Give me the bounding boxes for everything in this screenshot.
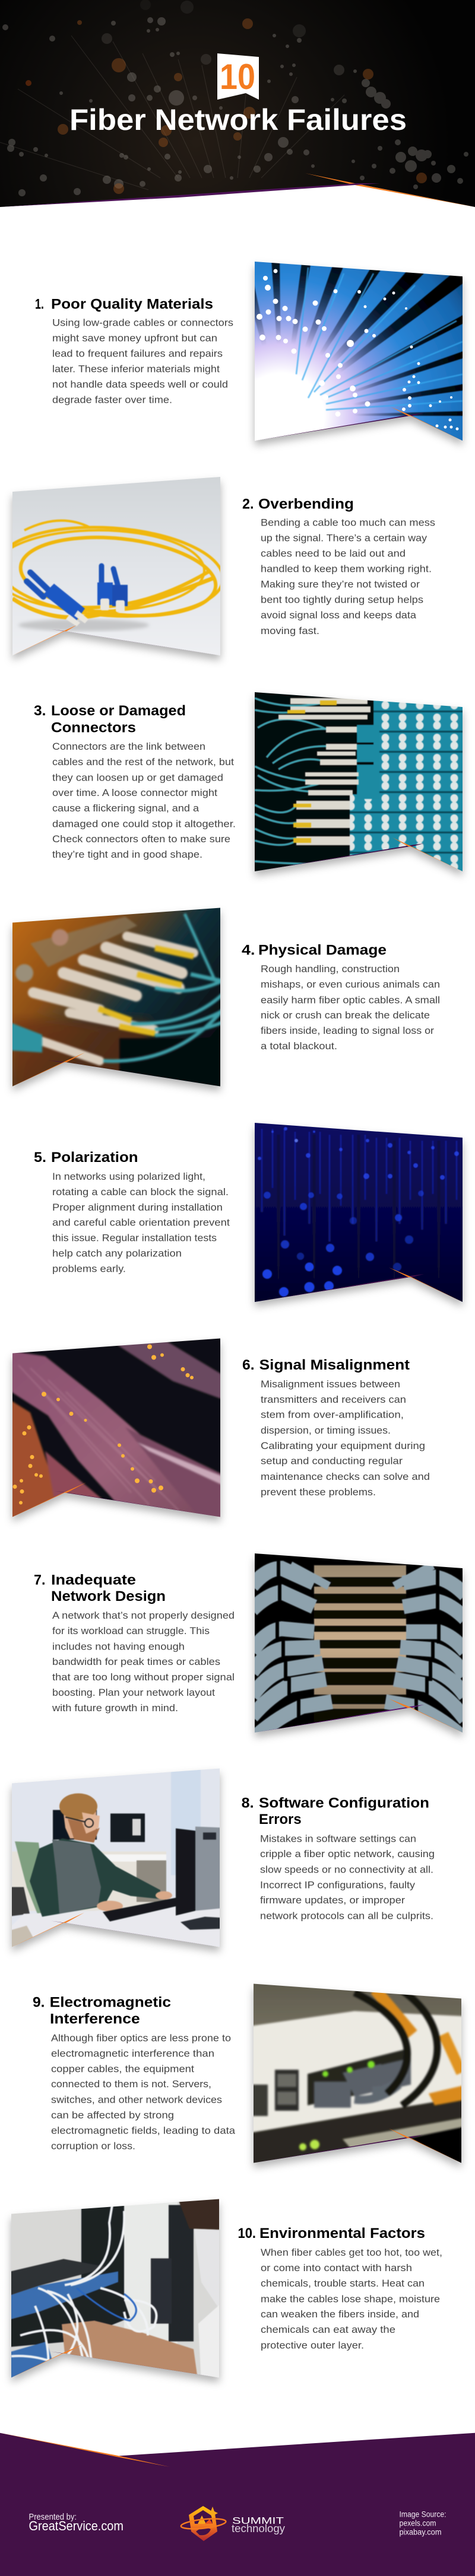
body text 4: Rough handling, construction	[261, 964, 400, 975]
body text 6	[261, 1379, 430, 1498]
body text 5: Proper alignment during installation	[52, 1202, 223, 1213]
body text 4: a total blackout.	[261, 1041, 337, 1052]
body text 9: Although fiber optics are less prone to	[51, 2033, 231, 2044]
body text 2: moving fast.	[261, 626, 319, 636]
photo: pink fiber bundles with orange points	[7, 1332, 226, 1523]
heading 6: 6.	[242, 1357, 255, 1373]
body text 7: for its workload can struggle. This	[52, 1626, 210, 1636]
body text 3: Connectors are the link between	[52, 741, 205, 752]
presented by: Presented by:	[28, 2513, 77, 2522]
header banner	[0, 0, 475, 207]
body text 5	[52, 1171, 230, 1275]
body text 9: electromagnetic fields, leading to data	[51, 2125, 236, 2136]
heading 9: Interference	[50, 2011, 140, 2027]
body text 5: and careful cable orientation prevent	[52, 1218, 230, 1228]
body text 9	[51, 2033, 236, 2152]
body text 3: Check connectors often to make sure	[52, 834, 230, 845]
section 6: signal misalignment	[7, 1332, 430, 1523]
body text 4: nick or crush can break the delicate	[261, 1010, 430, 1021]
presented by: GreatService.com	[28, 2518, 124, 2533]
body text 10: chemicals, trouble starts. Heat can	[261, 2278, 425, 2289]
banner background photo	[0, 0, 475, 207]
body text 7: bandwidth for peak times or cables	[52, 1657, 220, 1667]
heading 8: 8.	[242, 1795, 254, 1811]
photo: server rack cable bundles	[249, 1547, 468, 1738]
body text 3: cables and the rest of the network, but	[52, 757, 234, 768]
body text 2: handled to keep them working right.	[261, 564, 432, 575]
body text 1	[52, 318, 233, 406]
heading 9: 9.	[33, 1994, 45, 2011]
body text 7: includes not having enough	[52, 1641, 185, 1652]
body text 7: that are too long without proper signal	[52, 1672, 235, 1683]
photo: technician wiring a switch	[5, 2193, 225, 2384]
heading 9: Electromagnetic	[50, 1994, 171, 2011]
body text 6: prevent these problems.	[261, 1487, 376, 1498]
body text 6: Misalignment issues between	[261, 1379, 400, 1390]
body text 2: Making sure they’re not twisted or	[261, 579, 420, 590]
photo: teal patch panel	[249, 686, 468, 877]
body text 5: rotating a cable can block the signal.	[52, 1187, 229, 1198]
heading 7: Inadequate	[51, 1572, 136, 1588]
icon: summit shield	[180, 2506, 226, 2541]
body text 9: corruption or loss.	[51, 2141, 135, 2152]
body text 7	[52, 1610, 235, 1714]
logo	[180, 2506, 285, 2541]
body text 2: Bending a cable too much can mess	[261, 518, 435, 528]
body text 10: When fiber cables get too hot, too wet,	[261, 2247, 442, 2258]
body text 2: up the signal. There’s a certain way	[261, 533, 428, 543]
body text 9: copper cables, the equipment	[51, 2064, 194, 2074]
heading 10: Environmental Factors	[259, 2225, 425, 2241]
image source credits: Image Source:	[399, 2510, 446, 2518]
heading 7: 7.	[34, 1572, 45, 1588]
heading 8	[242, 1795, 429, 1827]
image source credits: pexels.com	[399, 2518, 436, 2528]
body text 3: they can loosen up or get damaged	[52, 772, 223, 783]
body text 10: protective outer layer.	[261, 2340, 364, 2351]
logo wordmark: SUMMIT	[232, 2516, 284, 2526]
section 8: software configuration errors	[6, 1763, 435, 1954]
body text 6: Calibrating your equipment during	[261, 1441, 425, 1451]
body text 8	[260, 1833, 435, 1921]
body text 9: can be affected by strong	[51, 2110, 174, 2120]
body text 10: chemicals can eat away the	[261, 2325, 395, 2335]
presented by	[28, 2513, 124, 2533]
logo wordmark: technology	[232, 2523, 285, 2534]
heading 7: Network Design	[51, 1588, 166, 1604]
heading 10: 10.	[238, 2225, 256, 2241]
photo: yellow fiber patch cable	[0, 471, 226, 662]
body text 1: lead to frequent failures and repairs	[52, 348, 223, 359]
heading 2: 2.	[242, 496, 254, 512]
section 9: electromagnetic interference	[33, 1978, 467, 2169]
section 2: overbending	[0, 471, 435, 662]
heading 5: Polarization	[51, 1150, 138, 1166]
body text 3	[52, 741, 236, 860]
heading 3: Loose or Damaged	[51, 703, 186, 719]
body text 6: transmitters and receivers can	[261, 1394, 406, 1405]
heading 5: 5.	[34, 1150, 46, 1166]
body text 5: help catch any polarization	[52, 1248, 182, 1259]
heading 9	[33, 1994, 171, 2027]
photo: blue fiber lights	[249, 1117, 468, 1308]
body text 1: might save money upfront but can	[52, 333, 217, 343]
heading 1: 1.	[35, 297, 44, 312]
body text 8: Incorrect IP configurations, faulty	[260, 1880, 416, 1890]
image source credits: pixabay.com	[399, 2528, 442, 2536]
image source credits	[399, 2510, 446, 2536]
body text 9: connected to them is not. Servers,	[51, 2079, 211, 2090]
body text 10: can weaken the fibers inside, and	[261, 2309, 419, 2320]
body text 6: maintenance checks can solve and	[261, 1472, 430, 1482]
heading 7	[34, 1572, 166, 1604]
body text 6: stem from over-amplification,	[261, 1410, 404, 1421]
photo: orange board and white connectors	[7, 902, 226, 1093]
body text 7: with future growth in mind.	[52, 1703, 178, 1714]
body text 2: avoid signal loss and keeps data	[261, 610, 417, 620]
heading 3: 3.	[34, 703, 46, 719]
section 4: physical damage	[7, 902, 440, 1093]
body text 8: network protocols can all be culprits.	[260, 1910, 433, 1921]
body text 3: cause a flickering signal, and a	[52, 803, 200, 814]
body text 4	[261, 964, 440, 1052]
heading 2: Overbending	[258, 496, 354, 512]
body text 1: later. These inferior materials might	[52, 364, 220, 375]
section 10: environmental factors	[5, 2193, 442, 2384]
body text 7: A network that’s not properly designed	[52, 1610, 235, 1621]
body text 5: In networks using polarized light,	[52, 1171, 205, 1182]
heading 8: Errors	[259, 1811, 302, 1827]
photo: glowing blue fiber strands	[249, 256, 468, 447]
orange accent line	[305, 173, 475, 207]
body text 1: Using low-grade cables or connectors	[52, 318, 233, 329]
body text 8: Mistakes in software settings can	[260, 1833, 416, 1844]
body text 2: cables need to be laid out and	[261, 548, 406, 559]
body text 10	[261, 2247, 442, 2351]
body text 10: or come into contact with harsh	[261, 2263, 412, 2273]
body text 8: cripple a fiber optic network, causing	[260, 1849, 435, 1859]
body text 5: problems early.	[52, 1264, 126, 1275]
body text 3: over time. A loose connector might	[52, 788, 217, 798]
section 3: loose or damaged connectors	[34, 686, 468, 877]
body text 10: make the cables lose shape, moisture	[261, 2294, 440, 2304]
body text 6: setup and conducting regular	[261, 1456, 403, 1467]
body text 3: they’re tight and in good shape.	[52, 849, 202, 860]
badge with number 10: 10	[220, 57, 255, 97]
heading 3	[34, 703, 186, 735]
body text 2: bent too tightly during setup helps	[261, 594, 423, 605]
body text 5: this issue. Regular installation tests	[52, 1233, 217, 1244]
body text 8: slow speeds or no connectivity at all.	[260, 1864, 433, 1875]
body text 7: boosting. Plan your network layout	[52, 1687, 215, 1698]
body text 9: switches, and other network devices	[51, 2095, 222, 2106]
orange accent line	[0, 2433, 170, 2467]
logo wordmark	[232, 2516, 285, 2534]
photo: network router ports	[248, 1978, 467, 2169]
heading 6: Signal Misalignment	[259, 1357, 410, 1373]
footer	[0, 2433, 475, 2576]
heading 4: 4.	[242, 942, 255, 959]
body text 1: not handle data speeds well or could	[52, 380, 228, 390]
body text 4: easily harm fiber optic cables. A small	[261, 995, 440, 1005]
heading 1: Poor Quality Materials	[51, 297, 213, 312]
heading 4: Physical Damage	[258, 942, 387, 959]
body text 3: damaged one could stop it altogether.	[52, 819, 236, 829]
body text 4: mishaps, or even curious animals can	[261, 979, 440, 990]
purple accent line	[0, 183, 380, 207]
section 5: polarization	[34, 1117, 468, 1308]
footer background	[0, 2433, 475, 2576]
section 7: inadequate network design	[34, 1547, 468, 1738]
title: Fiber Network Failures	[69, 103, 407, 136]
heading 8: Software Configuration	[259, 1795, 429, 1811]
section 1: poor quality materials	[35, 256, 468, 447]
body text 9: electromagnetic interference than	[51, 2048, 214, 2059]
body text 2	[261, 518, 435, 636]
heading 3: Connectors	[51, 719, 136, 735]
body text 8: firmware updates, or improper	[260, 1895, 406, 1906]
photo: engineer at computer	[6, 1763, 226, 1954]
body text 6: dispersion, or timing issues.	[261, 1425, 391, 1436]
body text 4: fibers inside, leading to signal loss or	[261, 1026, 435, 1036]
body text 1: degrade faster over time.	[52, 395, 172, 406]
